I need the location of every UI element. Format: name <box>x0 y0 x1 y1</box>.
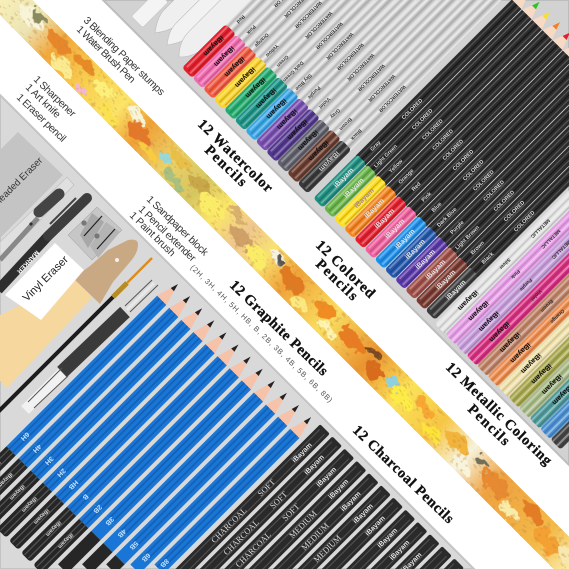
colored pencil: brown: iBayam <box>435 269 457 291</box>
metallic pencil: teal <box>529 284 569 429</box>
colored pencil: teal: COLORED <box>401 98 424 121</box>
charcoal pencil: soft 3: SOFT <box>280 502 301 523</box>
colored pencil: yellow <box>334 7 555 228</box>
colored pencil: black: Black <box>481 251 495 266</box>
charcoal pencil: medium 1 <box>208 461 366 569</box>
metallic pencil: rose brown <box>477 232 569 376</box>
watercolor pencil: sky blue: iBayam <box>265 97 289 121</box>
colored pencil: purple <box>395 68 569 289</box>
graphite pencil: 3H <box>0 304 207 526</box>
metallic pencil: silver: iBayam <box>456 288 480 313</box>
charcoal pencil: soft 2: CHARCOAL <box>222 518 261 557</box>
watercolor pencil: dark green: WATERCOLOR <box>314 20 344 50</box>
vinyl eraser: Vinyl Eraser <box>21 254 71 304</box>
charcoal pencil: soft 1: SOFT <box>256 477 277 498</box>
charcoal pencil: medium 1: MEDIUM <box>288 509 319 540</box>
colored pencil: purple: Purple <box>449 220 465 236</box>
caption: sandpaper, extender, paint brush: 1 Paint brush <box>127 210 177 259</box>
graphite pencil: 6H: 6H <box>19 430 30 442</box>
heading: 12 Metallic Coloring Pencils: 12 Metallic Coloring <box>442 359 555 469</box>
graphite pencil: 3H: 3H <box>43 455 54 466</box>
watercolor pencil: black: iBayam <box>317 149 342 174</box>
watercolor pencil: purple <box>255 0 467 152</box>
graphite pencil: 4H <box>0 292 195 514</box>
graphite pencil: 6B: 6B <box>140 551 151 563</box>
metallic pencil: cream: iBayam <box>519 351 543 376</box>
marker pen: MARKER <box>15 249 40 275</box>
graphite pencil: HB: HB <box>67 478 79 490</box>
metallic pencil: lilac: iBayam <box>477 309 501 334</box>
colored pencil: green: COLORED <box>411 108 435 131</box>
watercolor pencil: violet: iBayam <box>286 118 310 142</box>
colored pencil: purple: COLORED <box>483 179 506 203</box>
watercolor pencil: purple: Purple <box>306 85 321 100</box>
graphite pencil: 6B <box>130 400 304 569</box>
heading: 12 Charcoal Pencils: 12 Charcoal Pencils <box>349 422 457 527</box>
watercolor pencil: yellow: Yellow <box>264 43 279 58</box>
colored pencil: yellow: Yellow <box>388 158 405 175</box>
watercolor pencil: sky blue: Sky Blue <box>294 72 313 92</box>
colored pencil: red: Red <box>411 181 422 193</box>
watercolor pencil: gray: WATERCOLOR <box>356 62 386 92</box>
graphite pencil: HB <box>9 328 231 550</box>
graphite pencil: 2B: 2B <box>92 503 103 514</box>
graphite pencil: B: iBayam <box>44 519 62 537</box>
colored pencil: teal: Gray <box>369 140 382 153</box>
metallic pencil: black <box>550 305 569 450</box>
charcoal pencil: hard 1: iBayam <box>364 515 387 538</box>
caption: sandpaper, extender, paint brush: 1 Sandpaper block <box>144 194 210 259</box>
heading: 12 Colored Pencils: 12 Colored <box>312 237 378 302</box>
metallic pencil: magenta: iBayam <box>487 320 512 344</box>
graphite pencil: B: B <box>81 492 89 501</box>
watercolor pencil: violet <box>266 0 478 162</box>
colored pencils <box>313 0 569 320</box>
graphite pencil: 3B: 3B <box>104 515 115 526</box>
watercolor pencils <box>182 0 509 194</box>
colored pencil: navy: iBayam <box>404 238 427 261</box>
watercolor pencil: gray <box>276 0 488 173</box>
metallic pencil: orange: iBayam <box>508 341 533 365</box>
watercolor pencil: violet: Violet <box>317 96 331 110</box>
watercolor pencil: brown: Brown <box>338 116 353 131</box>
graphite pencil: 2H: iBayam <box>20 495 38 513</box>
caption: sharpener, knife, eraser pencil <box>14 74 78 145</box>
charcoal pencil: medium 2 <box>220 473 379 569</box>
colored pencil: brown: COLORED <box>503 200 526 223</box>
charcoal pencil: medium 2: MEDIUM <box>300 521 331 552</box>
metallic pencil: lilac: Purple <box>518 277 533 292</box>
colored pencil: green: iBayam <box>343 177 366 200</box>
metallic pencil: silver <box>435 190 569 334</box>
metallic pencil: orchid: iBayam <box>466 299 491 323</box>
caption: blending stumps and brush pen: 1 Water Brush Pen <box>74 24 137 86</box>
colored pencil: yellow: iBayam <box>353 187 376 210</box>
colored pencil: light brown: Light Brown <box>454 225 481 251</box>
metallic pencil: orange: Orange <box>549 308 565 324</box>
colored pencil: navy: Dark Blue <box>436 207 458 229</box>
colored pencil: light brown: iBayam <box>425 259 447 281</box>
charcoal pencil: soft 1: CHARCOAL <box>210 506 249 545</box>
watercolor pencil: yellow: iBayam <box>233 65 258 90</box>
paint brush <box>0 258 152 412</box>
caption: blending stumps and brush pen: 3 Blending Paper stumps <box>81 15 166 98</box>
graphite pencil: 4B <box>82 376 279 569</box>
colored pencil: black: COLORED <box>513 210 537 233</box>
watercolor pencil: black <box>297 0 509 194</box>
charcoal pencil: soft 2: SOFT <box>268 490 289 511</box>
colored pencil: light brown <box>405 79 569 300</box>
watercolor pencil: orange: iBayam <box>223 55 247 79</box>
charcoal pencil: hard 2: iBayam <box>376 527 399 550</box>
charcoal pencil: extra 2 <box>294 546 452 569</box>
charcoal pencil: soft 1: iBayam <box>291 442 314 464</box>
colored pencil: brown <box>415 89 569 310</box>
watercolor pencil: brown: iBayam <box>307 139 331 163</box>
blending stumps and brush pen <box>131 0 272 65</box>
colored pencil: pink: Pink <box>421 191 433 203</box>
heading: 12 Watercolor Pencils: Pencils <box>201 142 250 190</box>
watercolor pencil: red: iBayam <box>202 34 226 58</box>
charcoal pencil: medium 3: MEDIUM <box>312 533 343 564</box>
watercolor pencil: purple: iBayam <box>275 107 300 132</box>
watercolor pencil: violet: WATERCOLOR <box>345 52 375 82</box>
colored pencil: green <box>323 0 544 218</box>
watercolor pencil: brown <box>287 0 499 183</box>
sandpaper block <box>0 240 138 388</box>
graphite pencil: 3B <box>58 364 267 569</box>
watercolor pencil: green: WATERCOLOR <box>303 10 333 40</box>
watercolor pencil: pink <box>192 0 404 89</box>
heading: 12 Metallic Coloring Pencils: Pencils <box>464 401 513 449</box>
metallic pencil: sage: iBayam <box>540 372 564 397</box>
colored pencil: yellow: COLORED <box>421 118 445 142</box>
colored pencil: navy <box>385 58 569 279</box>
watercolor pencil: dark green: iBayam <box>254 86 279 111</box>
heading: 12 Graphite Pencils: 12 Graphite Pencils <box>226 277 331 379</box>
colored pencil: red <box>354 28 569 249</box>
colored pencil: orange: COLORED <box>432 128 455 152</box>
watercolor pencil: orange: Orange <box>253 31 270 48</box>
metallic pencil: orchid <box>445 200 569 345</box>
stump 1 <box>148 0 247 40</box>
watercolor pencil: yellow <box>213 0 425 110</box>
metallic pencil: cream <box>498 253 569 397</box>
charcoal pencil: soft 2: iBayam <box>303 454 326 477</box>
colored pencil: pink: iBayam <box>384 218 406 240</box>
charcoal pencil: hard 2 <box>257 510 415 569</box>
metallic pencil: orchid: METALLIC <box>539 228 561 250</box>
graphite pencil: 2B: iBayam <box>56 532 74 549</box>
caption: graphite grades: (2H, 3H, 4H, 5H, HB, B, 2B, 3B, 4B, 5B, 6B, 8B) <box>189 263 334 404</box>
watercolor pencil: dark green: Dark Green <box>281 60 304 83</box>
sharpener <box>68 207 122 260</box>
charcoal pencil: extra 1 <box>281 534 440 569</box>
graphite pencil: 8B <box>154 413 316 569</box>
colored pencil: black <box>425 99 569 320</box>
charcoal pencils <box>172 424 464 569</box>
watercolor pencil: black: WATERCOLOR <box>377 83 407 113</box>
watercolor pencil: gray: Gray <box>328 107 341 120</box>
watercolor pencil: orange <box>203 0 415 99</box>
watercolor pencil: green: iBayam <box>244 76 268 100</box>
graphite pencil: 3H: iBayam <box>8 483 26 501</box>
colored pencil: brown: Brown <box>470 240 486 256</box>
metallic pencil: rose brown: iBayam <box>498 330 522 355</box>
charcoal pencil: medium 2: iBayam <box>340 491 362 513</box>
colored pencil: orange: Orange <box>398 168 415 186</box>
metallic pencil: olive: iBayam <box>529 362 554 386</box>
graphite pencil: 2B <box>33 352 255 569</box>
vinyl eraser <box>5 243 84 320</box>
charcoal pencil: medium 1: iBayam <box>328 478 350 501</box>
metallic pencil: magenta: Violet <box>529 288 543 302</box>
graphite pencil: 2H <box>0 316 219 538</box>
metallic pencil: silver: Silver <box>498 257 511 270</box>
watercolor pencil: brown: WATERCOLOR <box>366 73 396 103</box>
graphite pencil: B <box>21 340 243 562</box>
colored pencil: orange <box>344 17 565 238</box>
graphite pencil: 4H: 4H <box>31 442 42 454</box>
colored pencil: red: COLORED <box>442 139 465 162</box>
colored pencil: navy: COLORED <box>472 169 496 193</box>
metallic pencil: olive <box>508 263 569 408</box>
watercolor pencil: pink: Pink <box>245 23 257 35</box>
caption: sharpener, knife, eraser pencil: 1 Sharpener <box>31 74 78 120</box>
marker pen <box>0 198 87 290</box>
watercolor pencil: sky blue: WATERCOLOR <box>324 31 354 61</box>
graphite pencil: 4B: 4B <box>116 527 127 538</box>
stump 2 <box>161 0 258 51</box>
colored pencil: purple: iBayam <box>414 248 437 271</box>
watercolor pencil: red: Red <box>235 13 246 24</box>
colored pencil: pink <box>364 38 569 259</box>
graphite pencil: 5B: 5B <box>128 539 139 551</box>
pencil extender <box>25 280 158 410</box>
colored pencil: blue <box>374 48 569 269</box>
watercolor pencil: red <box>182 0 394 78</box>
metallic pencils <box>435 190 569 450</box>
watercolor pencil: black: Black <box>349 127 363 141</box>
charcoal pencil: hard 1 <box>245 497 403 569</box>
charcoal pencil: extra 3 <box>306 558 464 569</box>
graphite pencils <box>0 279 316 569</box>
eraser pencil <box>0 177 74 262</box>
colored pencil: blue: COLORED <box>462 159 486 182</box>
colored pencil: teal: iBayam <box>333 167 355 189</box>
metallic pencil: blue <box>540 295 569 439</box>
charcoal pencil: medium 3 <box>233 485 391 569</box>
charcoal pencil: soft 3: iBayam <box>315 466 338 489</box>
watercolor pencil: purple: WATERCOLOR <box>335 41 365 71</box>
colored pencil: teal <box>313 0 534 208</box>
caption: sharpener, knife, eraser pencil: 1 Art knife <box>23 82 62 121</box>
metallic pencil: sage <box>519 274 569 418</box>
panel: lower-left accessories tray <box>0 95 474 569</box>
metallic pencil: lilac <box>456 211 569 355</box>
watercolor pencil: gray: iBayam <box>296 128 321 153</box>
colored pencil: black: iBayam <box>445 279 468 302</box>
watercolor pencil: pink: iBayam <box>212 44 237 69</box>
graphite pencil: 6H <box>0 279 183 501</box>
colored pencil: red: iBayam <box>374 208 396 230</box>
colored pencil: blue: iBayam <box>394 228 417 251</box>
stump 3 <box>171 0 272 65</box>
water brush pen <box>131 0 177 28</box>
heading: 12 Colored Pencils: Pencils <box>312 256 361 304</box>
metallic pencil: orchid: Pink <box>509 268 521 280</box>
colored pencil: pink: COLORED <box>452 149 475 172</box>
charcoal pencil: soft 3: CHARCOAL <box>234 530 273 569</box>
graphite pencil: 2H: 2H <box>55 467 66 478</box>
colored pencil: orange: iBayam <box>363 197 386 220</box>
graphite pencil: 8B: 8B <box>158 557 170 568</box>
panel: upper-right pencil tray <box>103 0 569 465</box>
watercolor pencil: green: Green <box>275 54 289 68</box>
charcoal pencil: medium 3: iBayam <box>352 503 375 525</box>
kneaded eraser <box>0 132 63 240</box>
metallic pencil: magenta <box>466 221 569 366</box>
metallic pencil: orange <box>487 242 569 387</box>
graphite pencil: 5B <box>106 388 291 569</box>
charcoal pencil: hard 3 <box>269 522 427 569</box>
charcoal pencil: soft 3 <box>196 449 354 569</box>
watercolor pencil: dark green <box>234 0 446 131</box>
colored pencil: blue: Blue <box>431 201 443 214</box>
graphite pencil: HB: iBayam <box>32 507 50 525</box>
metallic pencil: silver: METALLIC <box>529 217 551 239</box>
watercolor pencil: sky blue <box>245 0 457 141</box>
heading: 12 Watercolor Pencils: 12 Watercolor <box>194 116 276 196</box>
metallic pencil: rose brown: Brown <box>539 298 554 313</box>
charcoal pencil: hard 3: iBayam <box>389 539 411 562</box>
caption: sandpaper, extender, paint brush: 1 Pencil extender <box>136 204 198 265</box>
caption: sharpener, knife, eraser pencil: 1 Eraser pencil <box>14 92 68 145</box>
watercolor pencil: yellow: WATERCOLOR <box>293 0 323 29</box>
charcoal pencil: soft 1 <box>172 424 330 569</box>
charcoal pencil: soft 2 <box>184 436 342 569</box>
colored pencil: green: Light Green <box>373 144 399 169</box>
watercolor pencil: green <box>224 0 436 120</box>
colored pencil: light brown: COLORED <box>493 190 516 213</box>
